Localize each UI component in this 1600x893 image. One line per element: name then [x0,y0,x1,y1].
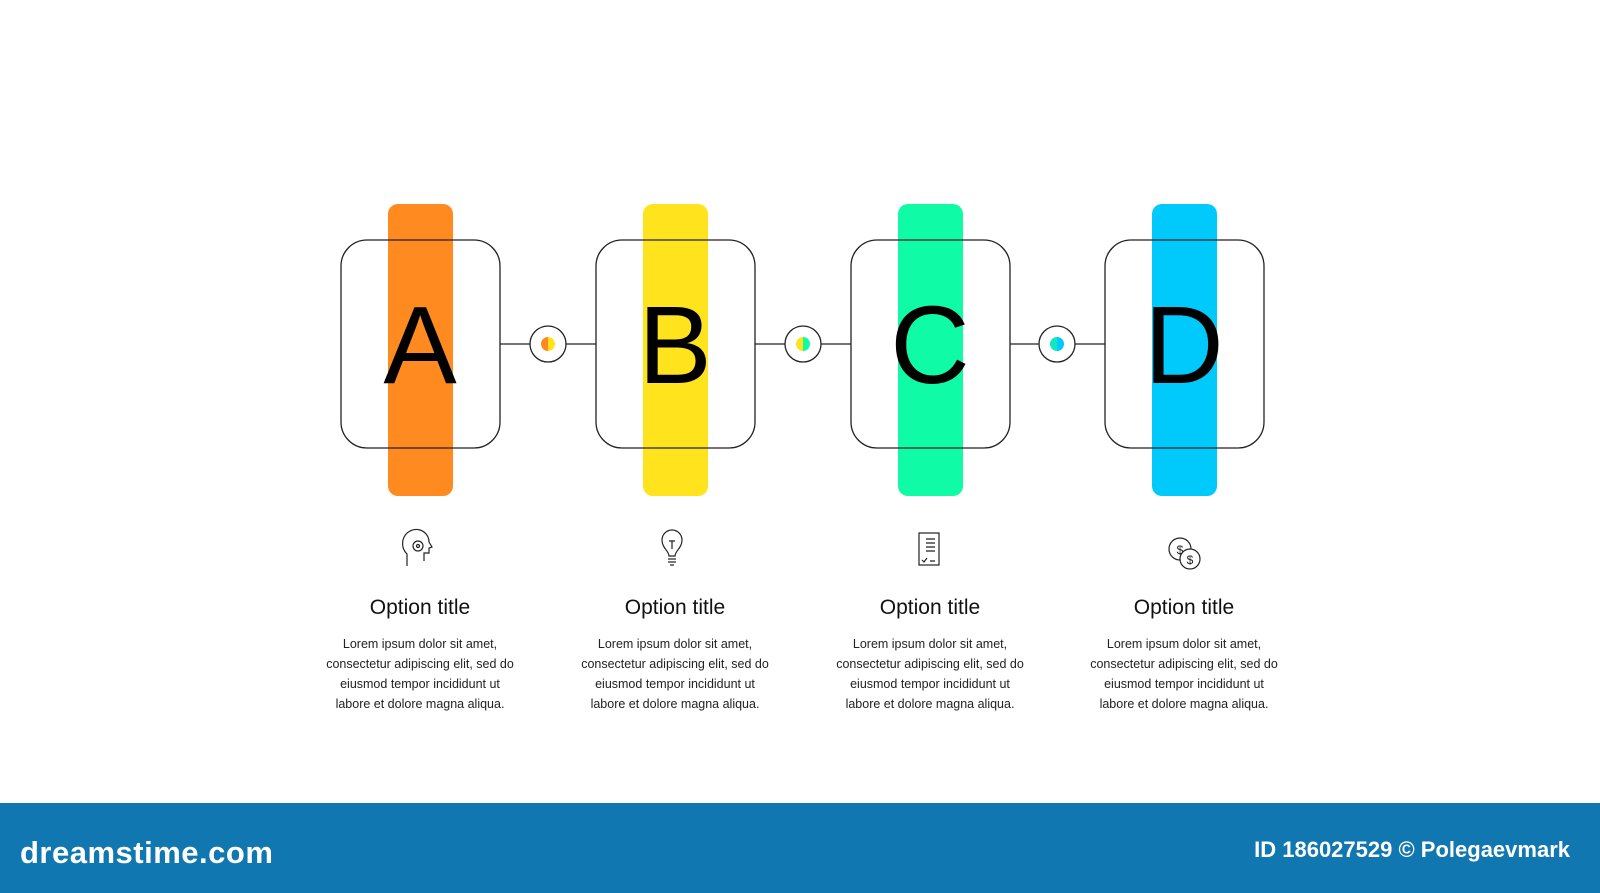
text: Lorem ipsum dolor sit amet, [853,637,1007,651]
text: eiusmod tempor incididunt ut [595,677,755,691]
step C: C [890,284,970,407]
footer bar [0,803,1600,893]
icon: document [919,533,939,565]
text: eiusmod tempor incididunt ut [1104,677,1264,691]
text: eiusmod tempor incididunt ut [340,677,500,691]
text: labore et dolore magna aliqua. [846,697,1014,711]
column C text [836,596,1024,711]
step A [341,204,500,496]
column A text [326,596,514,711]
column D text [1090,596,1278,711]
step A: A [383,284,457,407]
text: consectetur adipiscing elit, sed do [581,657,769,671]
step B [596,204,755,496]
connector lines [500,343,1105,345]
text: eiusmod tempor incididunt ut [850,677,1010,691]
text: labore et dolore magna aliqua. [1100,697,1268,711]
text: Lorem ipsum dolor sit amet, [343,637,497,651]
connector node C-D [1039,326,1075,362]
icon: coins: $ [1177,543,1184,557]
text: consectetur adipiscing elit, sed do [326,657,514,671]
footer logo: dreamstime.com [20,835,273,870]
text: Lorem ipsum dolor sit amet, [1107,637,1261,651]
connector node B-C [785,326,821,362]
icon: light bulb [662,530,682,565]
text: Option title [625,596,725,619]
text: labore et dolore magna aliqua. [591,697,759,711]
text: Option title [370,596,470,619]
icon: coins [1169,538,1200,569]
text: Option title [880,596,980,619]
step D: D [1144,284,1224,407]
text: consectetur adipiscing elit, sed do [836,657,1024,671]
step C [851,204,1010,496]
text: Lorem ipsum dolor sit amet, [598,637,752,651]
icon: head with gear [403,529,432,566]
step B: B [638,284,712,407]
text: labore et dolore magna aliqua. [336,697,504,711]
footer id: ID 186027529 © Polegaevmark [1254,837,1570,862]
icon: coins: $ [1187,553,1194,567]
step D [1105,204,1264,496]
column B text [581,596,769,711]
connector node A-B [530,326,566,362]
text: Option title [1134,596,1234,619]
text: consectetur adipiscing elit, sed do [1090,657,1278,671]
